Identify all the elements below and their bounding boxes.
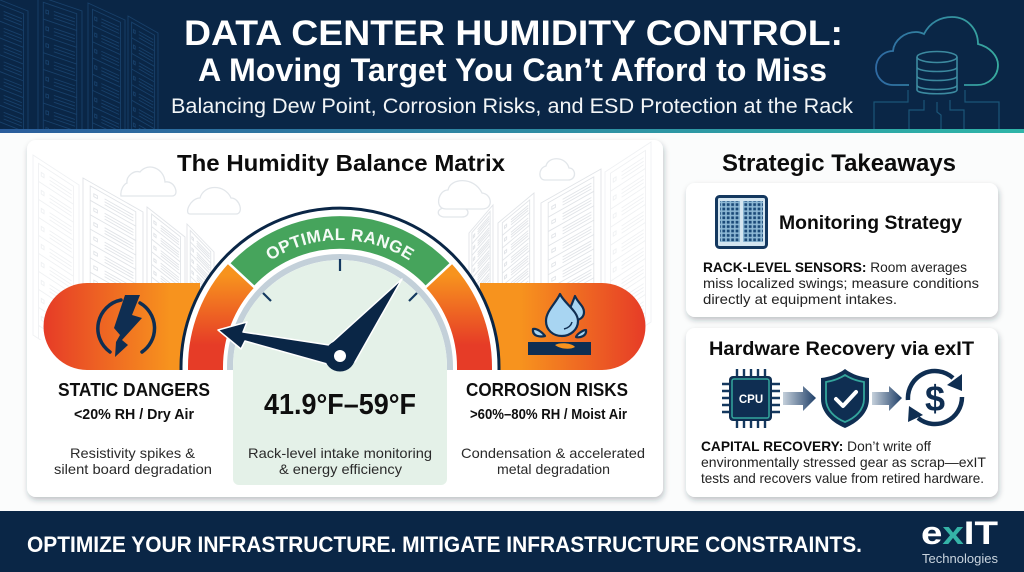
left risk pill: [44, 283, 200, 370]
panel: hardware recovery: [686, 328, 998, 497]
arrow: shield to recovery: [872, 386, 902, 411]
background server racks left: [32, 154, 214, 340]
gauge needle arrow: [218, 322, 329, 364]
title line two: A Moving Target You Can’t Afford to Miss: [198, 52, 827, 88]
optimal range text: 41.9°F–59°F: [264, 389, 416, 421]
panel: monitoring strategy: [686, 183, 998, 317]
monitoring body text: [703, 259, 979, 307]
monitoring body text: miss localized swings; measure conditions: [703, 275, 979, 291]
gauge: [180, 206, 500, 485]
monitoring body text: RACK-LEVEL SENSORS: Room averages: [703, 259, 967, 275]
static dangers text: Resistivity spikes &: [70, 445, 196, 461]
header banner: [0, 0, 1024, 133]
corrosion risks text: >60%–80% RH / Moist Air: [470, 407, 627, 423]
gauge: OPTIMAL RANGE: [266, 228, 414, 260]
optimal range text: Rack-level intake monitoring: [248, 445, 432, 461]
gauge hub: [324, 340, 356, 372]
static dangers text: <20% RH / Dry Air: [74, 407, 194, 423]
subtitle: Balancing Dew Point, Corrosion Risks, and ESD Protection at the Rack: [171, 94, 853, 118]
icon: shield check: [821, 369, 869, 428]
title line one: DATA CENTER HUMIDITY CONTROL:: [184, 14, 843, 53]
icon: water drops on corroded metal: [528, 294, 591, 355]
header cloud and database icon: [874, 17, 999, 129]
footer slogan: OPTIMIZE YOUR INFRASTRUCTURE. MITIGATE INFRASTRUCTURE CONSTRAINTS.: [27, 532, 862, 557]
gauge needle long: [329, 279, 402, 362]
icon: cpu: [722, 369, 780, 428]
arrow: cpu to shield: [783, 386, 816, 411]
recovery body text: CAPITAL RECOVERY: Don’t write off: [701, 438, 931, 454]
recovery body text: tests and recovers value from retired hardware.: [701, 470, 984, 486]
static dangers text: silent board degradation: [54, 461, 212, 477]
logo: exIT Technologies: exIT: [921, 515, 999, 551]
section heading: The Humidity Balance Matrix: [177, 150, 505, 176]
curved label: [243, 240, 437, 285]
header server racks line art: [0, 0, 158, 129]
gauge ticks: [263, 259, 417, 301]
gauge optimal band: [229, 215, 451, 287]
monitoring heading: Monitoring Strategy: [779, 213, 962, 234]
optimal range text: [248, 389, 432, 477]
header accent strip: [0, 129, 1024, 133]
recovery heading: Hardware Recovery via exIT: [709, 338, 974, 360]
gauge grey ring: [230, 257, 450, 370]
right risk pill: [480, 283, 645, 370]
gauge upper range band right: [426, 263, 492, 370]
gauge outer arc: [181, 208, 499, 370]
background clouds: [121, 159, 574, 217]
corrosion risks text: Condensation & accelerated: [461, 445, 645, 461]
static dangers text: STATIC DANGERS: [58, 380, 210, 400]
panel: humidity balance matrix: [24, 140, 668, 504]
static dangers text: [54, 380, 212, 477]
recovery body text: environmentally stressed gear as scrap—exIT: [701, 454, 986, 470]
background server racks right: [468, 142, 652, 326]
icon: dollar recovery cycle: $: [925, 378, 945, 419]
monitoring body text: directly at equipment intakes.: [703, 291, 897, 307]
optimal range panel: [233, 260, 447, 485]
icon: dollar recovery cycle: [908, 371, 962, 424]
corrosion risks text: [461, 380, 645, 477]
corrosion risks text: metal degradation: [497, 461, 610, 477]
icon: sensor rack: [716, 196, 766, 248]
corrosion risks text: CORROSION RISKS: [466, 380, 628, 400]
heading: strategic takeaways: Strategic Takeaways: [722, 150, 956, 177]
icon: cpu: CPU: [739, 394, 763, 406]
icon: static lightning: [98, 295, 155, 357]
logo: exIT Technologies: Technologies: [922, 552, 998, 566]
gauge lower range band left: [188, 263, 254, 370]
footer banner: [0, 511, 1024, 572]
logo: exIT Technologies: [921, 515, 999, 566]
recovery body text: [701, 438, 986, 486]
optimal range text: & energy efficiency: [279, 461, 402, 477]
